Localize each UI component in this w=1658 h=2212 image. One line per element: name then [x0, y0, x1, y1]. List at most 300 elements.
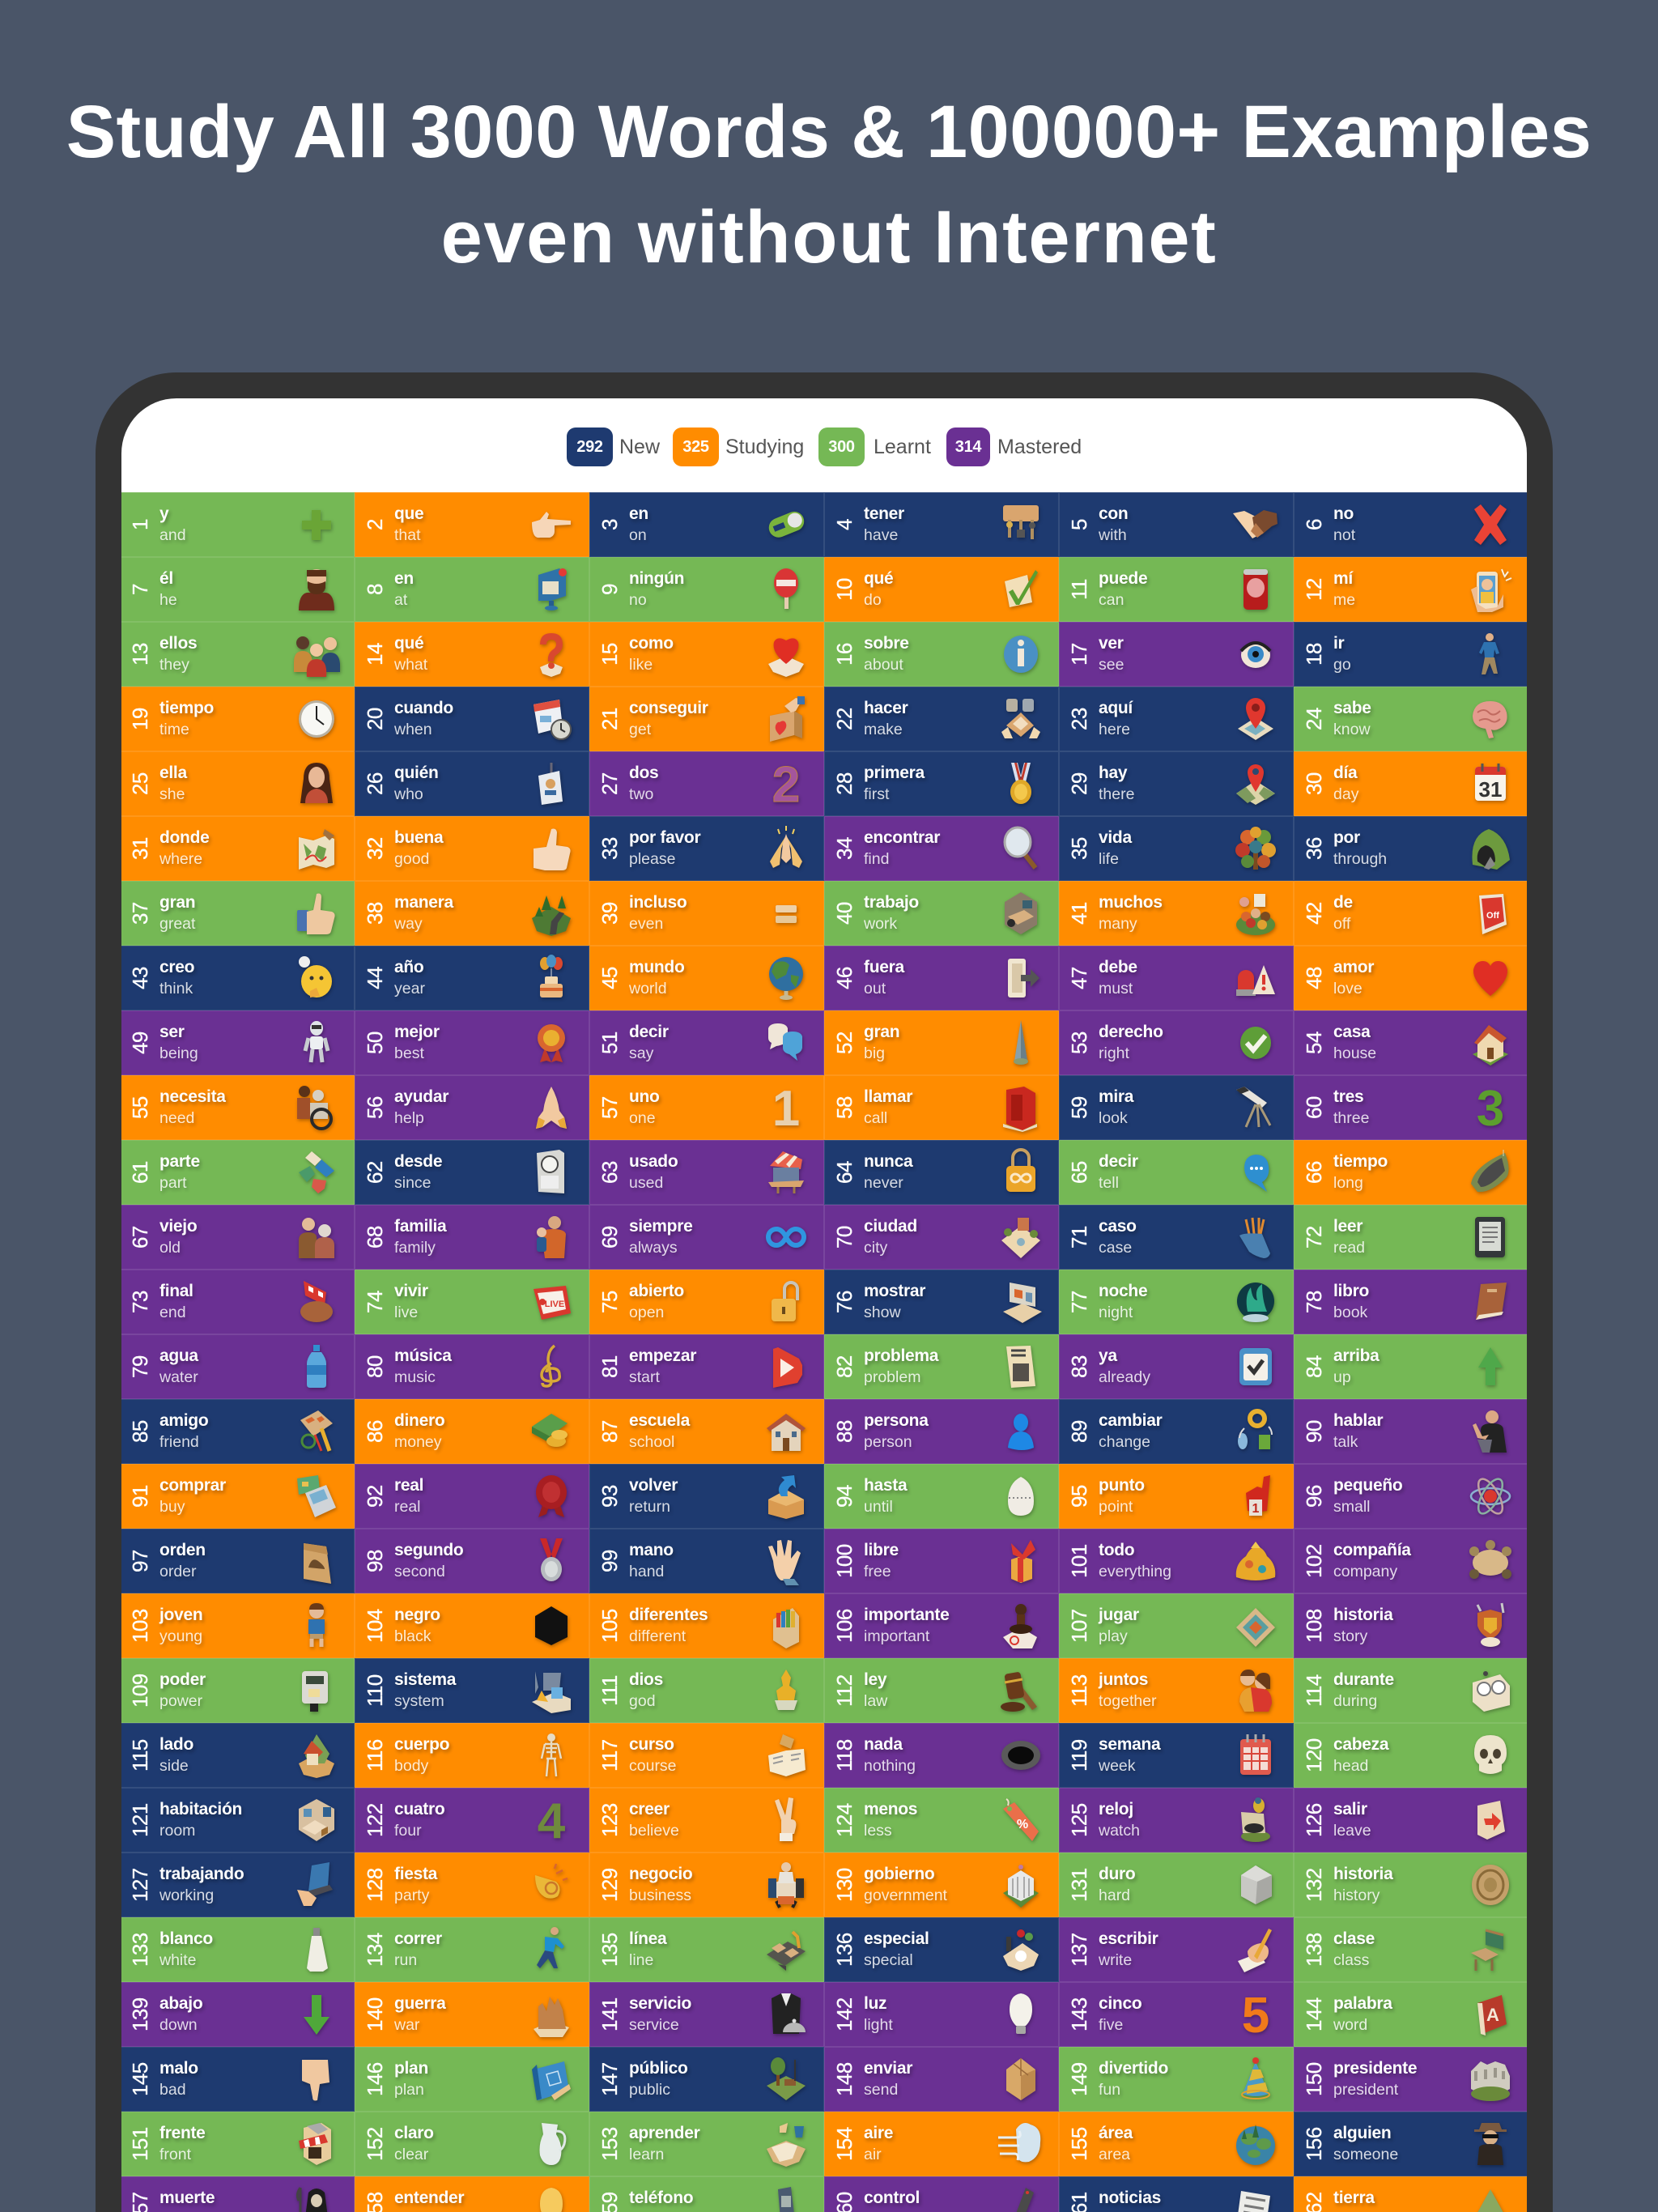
icon: house — [1466, 1019, 1515, 1067]
cell 17: ver — [1099, 634, 1124, 653]
cell 118: nothing — [864, 1757, 916, 1775]
cell 17 — [1059, 622, 1294, 687]
cell 102: 102 — [1302, 1544, 1326, 1578]
cell 28: 28 — [832, 772, 857, 795]
cell 4 — [824, 492, 1059, 557]
cell 131: duro — [1099, 1865, 1135, 1883]
icon: timer — [527, 1148, 576, 1197]
cell 98 — [355, 1529, 589, 1593]
cell 47 — [1059, 946, 1294, 1010]
cell 126: 126 — [1302, 1803, 1326, 1837]
icon: long road — [1466, 1148, 1515, 1197]
cell 108 — [1294, 1593, 1528, 1658]
cell 31: 31 — [128, 837, 152, 860]
cell 72: 72 — [1302, 1226, 1326, 1249]
cell 141 — [589, 1982, 824, 2047]
cell 64 — [824, 1140, 1059, 1205]
cell 111 — [589, 1658, 824, 1723]
cell 50: 50 — [363, 1032, 387, 1054]
cell 68: 68 — [363, 1226, 387, 1249]
cell 112 — [824, 1658, 1059, 1723]
cell 37 — [120, 881, 355, 946]
cell 133: blanco — [159, 1929, 213, 1948]
cell 108: story — [1333, 1627, 1367, 1645]
cell 29: 29 — [1067, 772, 1091, 795]
cell 32: good — [394, 850, 429, 868]
icon: island house — [292, 1731, 341, 1780]
cell 100: free — [864, 1563, 891, 1580]
cell 81: start — [629, 1368, 660, 1386]
cell 94: until — [864, 1498, 893, 1516]
cell 94: hasta — [864, 1476, 907, 1495]
cell 120: head — [1333, 1757, 1368, 1775]
cell 97: 97 — [128, 1550, 152, 1572]
cell 75: 75 — [597, 1291, 622, 1313]
cell 49: 49 — [128, 1032, 152, 1054]
icon: blueprint — [527, 2055, 576, 2104]
cell 60: 60 — [1302, 1096, 1326, 1119]
cell 144: 144 — [1302, 1997, 1326, 2031]
cell 62 — [355, 1140, 589, 1205]
cell 104 — [355, 1593, 589, 1658]
cell 27: dos — [629, 764, 658, 782]
cell 73: final — [159, 1282, 193, 1300]
cell 59: 59 — [1067, 1096, 1091, 1119]
icon: boy — [292, 1602, 341, 1650]
icon: wind — [997, 2120, 1045, 2168]
cell 148: enviar — [864, 2059, 912, 2078]
cell 62: desde — [394, 1152, 442, 1171]
cell 28: primera — [864, 764, 925, 782]
icon: map pin — [1238, 698, 1274, 742]
icon: runner — [527, 1925, 576, 1974]
icon: party horn — [527, 1861, 576, 1909]
cell 54: house — [1333, 1044, 1376, 1062]
icon: city — [997, 1213, 1045, 1261]
cell 48 — [1294, 946, 1528, 1010]
cell 148: 148 — [832, 2062, 857, 2096]
cell 84 — [1294, 1334, 1528, 1399]
cell 44: 44 — [363, 967, 387, 989]
icon: skeleton — [527, 1731, 576, 1780]
icon: speaker — [1466, 1407, 1515, 1456]
cell 27 — [589, 751, 824, 816]
cell 145: bad — [159, 2081, 186, 2099]
cell 146: 146 — [363, 2062, 387, 2096]
cell 3: en — [629, 504, 648, 523]
cell 9: ningún — [629, 569, 684, 588]
cell 95: point — [1099, 1498, 1133, 1516]
icon: office desk — [997, 889, 1045, 938]
cell 5 — [1059, 492, 1294, 557]
cell 44 — [355, 946, 589, 1010]
cell 2: that — [394, 526, 421, 544]
icon: key rack — [1002, 505, 1041, 541]
cell 103: 103 — [128, 1609, 152, 1643]
cell 77: 77 — [1067, 1291, 1091, 1313]
cell 129: 129 — [597, 1868, 622, 1902]
icon: check box — [1004, 570, 1039, 610]
cell 52: big — [864, 1044, 885, 1062]
cell 124 — [824, 1788, 1059, 1853]
icon: number four: 4 — [538, 1793, 566, 1849]
icon: infinity lock — [997, 1148, 1045, 1197]
word grid — [121, 492, 1527, 2212]
cell 45 — [589, 946, 824, 1010]
cell 155: 155 — [1067, 2127, 1091, 2161]
cell 96: small — [1333, 1498, 1371, 1516]
cell 143: cinco — [1099, 1994, 1141, 2013]
cell 46: out — [864, 980, 886, 998]
cell 108: historia — [1333, 1606, 1392, 1624]
icon: up arrow — [1466, 1342, 1515, 1391]
cell 65: 65 — [1067, 1161, 1091, 1184]
cell 49: ser — [159, 1023, 185, 1041]
icon: spy — [1466, 2120, 1515, 2168]
cell 1: y — [159, 504, 168, 523]
icon: market stall — [762, 1148, 810, 1197]
cell 132: history — [1333, 1887, 1380, 1904]
icon: red calendar — [1231, 1731, 1280, 1780]
cell 23: 23 — [1067, 708, 1091, 730]
icon: waving hand — [762, 1537, 810, 1585]
cell 130: 130 — [832, 1868, 857, 1902]
cell 115 — [120, 1723, 355, 1788]
cell 51: 51 — [597, 1032, 622, 1054]
cell 19: time — [159, 721, 189, 738]
icon: box with hand — [769, 696, 808, 745]
cell 106 — [824, 1593, 1059, 1658]
cell 147: 147 — [597, 2062, 622, 2096]
icon: bearded man — [298, 569, 337, 614]
cell 88 — [824, 1399, 1059, 1464]
cell 103: young — [159, 1627, 202, 1645]
cell 150: 150 — [1302, 2062, 1326, 2096]
cell 35: life — [1099, 850, 1119, 868]
cell 110: 110 — [363, 1674, 387, 1707]
cell 37: 37 — [128, 902, 152, 925]
icon: pencil case — [1231, 1213, 1280, 1261]
cell 63 — [589, 1140, 824, 1205]
cell 75 — [589, 1270, 824, 1334]
icon: soldiers statue — [527, 1990, 576, 2039]
icon: phone booth — [997, 1083, 1045, 1132]
cell 9 — [589, 557, 824, 622]
icon: white tube — [292, 1925, 341, 1974]
cell 88: persona — [864, 1411, 929, 1430]
cell 61 — [120, 1140, 355, 1205]
cell 142: light — [864, 2016, 893, 2034]
cell 124: less — [864, 1822, 892, 1840]
cell 127: working — [159, 1887, 214, 1904]
icon: parcel — [997, 2055, 1045, 2104]
cell 67: 67 — [128, 1226, 152, 1249]
cell 41: 41 — [1067, 902, 1091, 925]
icon: stamp — [997, 1602, 1045, 1650]
icon: off button: Off — [1486, 911, 1499, 921]
icon: exit sign — [1466, 1796, 1515, 1844]
cell 77: noche — [1099, 1282, 1147, 1300]
cell 134: run — [394, 1951, 417, 1969]
icon: rosette — [527, 1019, 576, 1067]
cell 59: mira — [1099, 1087, 1133, 1106]
cell 76 — [824, 1270, 1059, 1334]
icon: puzzle pieces — [292, 1148, 341, 1197]
cell 150: president — [1333, 2081, 1398, 2099]
cell 121: 121 — [128, 1803, 152, 1837]
cell 154: 154 — [832, 2127, 857, 2161]
cell 114: 114 — [1302, 1674, 1326, 1707]
icon: green mountain — [1466, 2184, 1515, 2212]
cell 135 — [589, 1917, 824, 1982]
cell 50: mejor — [394, 1023, 440, 1041]
cell 74: vivir — [394, 1282, 428, 1300]
cell 77: night — [1099, 1304, 1133, 1321]
cell 79: agua — [159, 1346, 198, 1365]
cell 72: read — [1333, 1239, 1365, 1257]
icon: government building — [997, 1861, 1045, 1909]
icon: brown book — [1466, 1278, 1515, 1326]
cell 88: person — [864, 1433, 912, 1451]
cell 137: 137 — [1067, 1933, 1091, 1967]
cell 68 — [355, 1205, 589, 1270]
cell 57: one — [629, 1109, 656, 1127]
icon: gold statue — [762, 1666, 810, 1715]
icon: alert siren — [1231, 954, 1280, 1002]
cell 64: nunca — [864, 1152, 912, 1171]
cell 42: 42 — [1302, 902, 1326, 925]
cell 142: 142 — [832, 1997, 857, 2031]
icon: park — [762, 2055, 810, 2104]
cell 117: 117 — [597, 1739, 622, 1772]
cell 122 — [355, 1788, 589, 1853]
icon: map pin on map — [1236, 764, 1276, 806]
cell 102: compañía — [1333, 1541, 1411, 1559]
cell 44: year — [394, 980, 425, 998]
cell 149: fun — [1099, 2081, 1120, 2099]
cell 10: do — [864, 591, 882, 609]
cell 152: 152 — [363, 2127, 387, 2161]
cell 149: 149 — [1067, 2062, 1091, 2096]
icon: number three: 3 — [1477, 1081, 1504, 1137]
icon: tunnel — [1472, 829, 1511, 872]
cell 91: buy — [159, 1498, 185, 1516]
cell 18: go — [1333, 656, 1351, 674]
cell 58 — [824, 1075, 1059, 1140]
cell 102 — [1294, 1529, 1528, 1593]
cell 69: always — [629, 1239, 678, 1257]
cell 114: durante — [1333, 1670, 1394, 1689]
cell 161 — [1059, 2176, 1294, 2212]
icon: isometric room — [292, 1796, 341, 1844]
cell 75: open — [629, 1304, 664, 1321]
legend: mastered label: Mastered — [997, 436, 1082, 458]
cell 110: system — [394, 1692, 444, 1710]
cell 17: 17 — [1067, 643, 1091, 666]
cell 13: 13 — [128, 643, 152, 666]
cell 44: año — [394, 958, 423, 976]
icon: red x — [1474, 504, 1507, 547]
cell 40: 40 — [832, 902, 857, 925]
cell 32: buena — [394, 828, 443, 847]
cell 116: 116 — [363, 1739, 387, 1772]
cell 68: familia — [394, 1217, 446, 1236]
cell 99: mano — [629, 1541, 674, 1559]
cell 131: 131 — [1067, 1868, 1091, 1902]
icon: stop sign — [773, 568, 801, 612]
icon: number two: 2 — [772, 757, 800, 813]
cell 86: money — [394, 1433, 442, 1451]
cell 21 — [589, 687, 824, 751]
cell 100: 100 — [832, 1544, 857, 1578]
cell 104: black — [394, 1627, 432, 1645]
icon: system — [527, 1666, 576, 1715]
cell 160: control — [864, 2189, 920, 2207]
icon: silver medal — [527, 1537, 576, 1585]
cell 27: 27 — [597, 772, 622, 795]
legend: new count: 292 — [576, 438, 603, 456]
cell 138: class — [1333, 1951, 1369, 1969]
icon: crowd — [1231, 889, 1280, 938]
icon: shop — [292, 2120, 341, 2168]
cell 6: 6 — [1302, 519, 1326, 530]
cell 85: 85 — [128, 1420, 152, 1443]
cell 34: find — [864, 850, 889, 868]
icon: infinity — [762, 1213, 810, 1261]
icon: special table — [997, 1925, 1045, 1974]
cell 93: volver — [629, 1476, 678, 1495]
icon: praying hands — [770, 826, 803, 870]
device frame — [96, 372, 1553, 2212]
cell 60: tres — [1333, 1087, 1363, 1106]
cell 23: here — [1099, 721, 1130, 738]
cell 157: muerte — [159, 2189, 215, 2207]
icon: yellow bulb — [527, 2184, 576, 2212]
cell 78 — [1294, 1270, 1528, 1334]
icon: chess clock — [1466, 1666, 1515, 1715]
cell 12: mí — [1333, 569, 1353, 588]
cell 103: joven — [159, 1606, 202, 1624]
cell 83: already — [1099, 1368, 1150, 1386]
cell 16: 16 — [832, 643, 857, 666]
cell 78: 78 — [1302, 1291, 1326, 1313]
cell 151: frente — [159, 2124, 206, 2142]
cell 106: 106 — [832, 1609, 857, 1643]
cell 152 — [355, 2112, 589, 2176]
cell 93: 93 — [597, 1485, 622, 1508]
cell 39 — [589, 881, 824, 946]
cell 45: 45 — [597, 967, 622, 989]
cell 107: 107 — [1067, 1609, 1091, 1643]
cell 97: orden — [159, 1541, 206, 1559]
cell 12: 12 — [1302, 578, 1326, 601]
cell 162 — [1294, 2176, 1528, 2212]
icon: equals — [774, 905, 800, 926]
cell 50: best — [394, 1044, 424, 1062]
cell 101: 101 — [1067, 1544, 1091, 1578]
cell 158: entender — [394, 2189, 464, 2207]
cell 84: up — [1333, 1368, 1351, 1386]
cell 56: ayudar — [394, 1087, 449, 1106]
cell 45: mundo — [629, 958, 684, 976]
cell 95: punto — [1099, 1476, 1145, 1495]
cell 53 — [1059, 1010, 1294, 1075]
cell 145 — [120, 2047, 355, 2112]
icon: couple hugging — [1231, 1666, 1280, 1715]
cell 24 — [1294, 687, 1528, 751]
icon: play button — [762, 1342, 810, 1391]
cell 11 — [1059, 557, 1294, 622]
icon: gavel — [997, 1666, 1045, 1715]
cell 30 — [1294, 751, 1528, 816]
cell 82: 82 — [832, 1355, 857, 1378]
cell 10 — [824, 557, 1059, 622]
cell 155 — [1059, 2112, 1294, 2176]
cell 99 — [589, 1529, 824, 1593]
cell 22: make — [864, 721, 903, 738]
cell 56: help — [394, 1109, 424, 1127]
icon: stone cube — [1231, 1861, 1280, 1909]
cell 52: 52 — [832, 1032, 857, 1054]
cell 65 — [1059, 1140, 1294, 1205]
cell 96 — [1294, 1464, 1528, 1529]
cell 66 — [1294, 1140, 1528, 1205]
cell 36: through — [1333, 850, 1387, 868]
icon: rushmore — [1466, 2055, 1515, 2104]
cell 117 — [589, 1723, 824, 1788]
cell 78: book — [1333, 1304, 1367, 1321]
cell 5: 5 — [1067, 519, 1091, 530]
cell 159 — [589, 2176, 824, 2212]
cell 33: por favor — [629, 828, 700, 847]
cell 148 — [824, 2047, 1059, 2112]
cell 74: 74 — [363, 1291, 387, 1313]
cell 61: 61 — [128, 1161, 152, 1184]
cell 8: at — [394, 591, 407, 609]
cell 122: cuatro — [394, 1800, 444, 1819]
cell 57: uno — [629, 1087, 660, 1106]
cell 87: 87 — [597, 1420, 622, 1443]
cell 28 — [824, 751, 1059, 816]
legend: new count — [567, 428, 613, 466]
cell 101: todo — [1099, 1541, 1134, 1559]
cell 51 — [589, 1010, 824, 1075]
cell 26: quién — [394, 764, 439, 782]
icon: conveyor — [762, 1925, 810, 1974]
icon: off button — [1466, 889, 1515, 938]
cell 5: con — [1099, 504, 1128, 523]
cell 150 — [1294, 2047, 1528, 2112]
cell 86: dinero — [394, 1411, 444, 1430]
cell 105 — [589, 1593, 824, 1658]
cell 1: and — [159, 526, 186, 544]
cell 92: 92 — [363, 1485, 387, 1508]
cell 40: work — [864, 915, 897, 933]
icon: eye — [1240, 641, 1273, 671]
cell 31 — [120, 816, 355, 881]
cell 86: 86 — [363, 1420, 387, 1443]
cell 151 — [120, 2112, 355, 2176]
cell 124: menos — [864, 1800, 917, 1819]
cell 19: 19 — [128, 708, 152, 730]
cell 21: conseguir — [629, 699, 708, 717]
cell 152: clear — [394, 2146, 428, 2163]
icon: puzzle book — [997, 1342, 1045, 1391]
cell 54 — [1294, 1010, 1528, 1075]
cell 15: como — [629, 634, 674, 653]
cell 76: mostrar — [864, 1282, 925, 1300]
icon: blue speech bubble — [1231, 1148, 1280, 1197]
